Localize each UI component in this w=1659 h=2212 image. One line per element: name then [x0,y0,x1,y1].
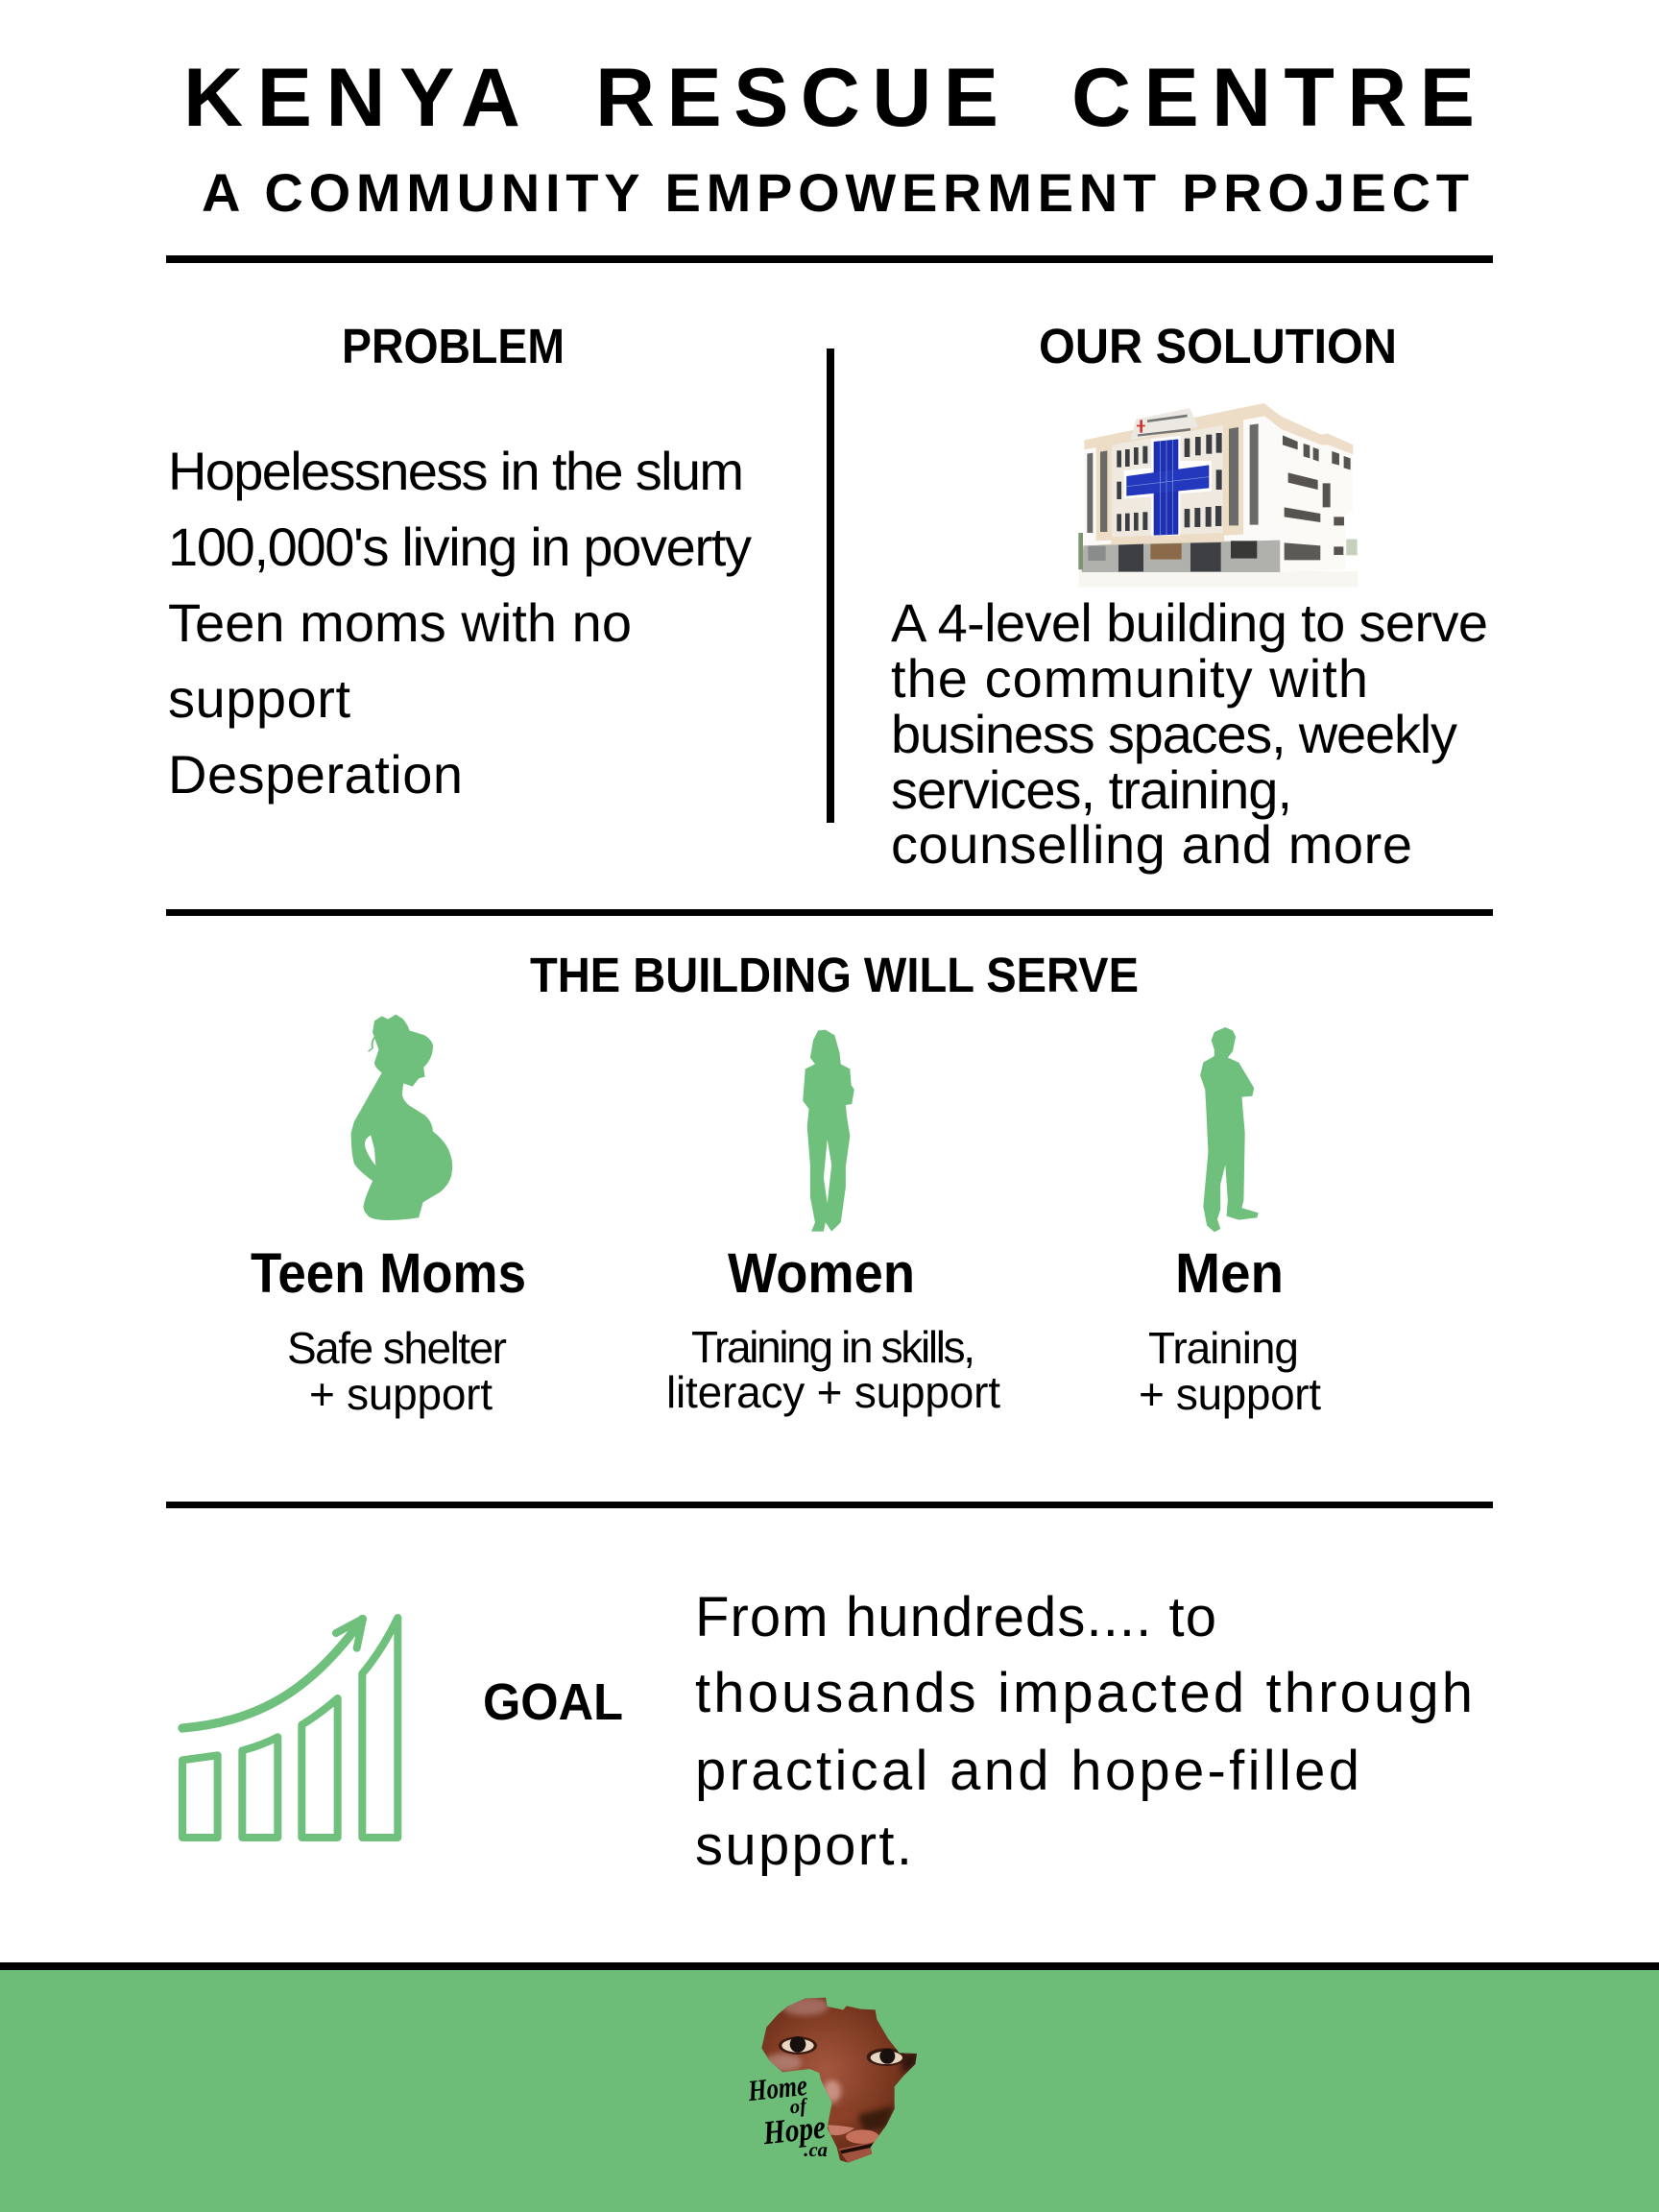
group: women: Women [728,1242,915,1305]
title: RESCUE [595,52,998,144]
heading: our solution: OUR SOLUTION [1039,319,1397,373]
group: men: + support [1139,1369,1321,1419]
goal text block [695,1586,1473,1877]
footer band [0,1962,1659,2212]
problem text block: Hopelessness in the slum [168,441,744,501]
subtitle: A COMMUNITY EMPOWERMENT PROJECT [202,162,1469,223]
title: CENTRE [1071,52,1475,144]
goal text block: From hundreds.... to [695,1586,1216,1648]
goal text block: thousands impacted through [695,1662,1473,1724]
problem text block: Teen moms with no [168,592,632,653]
heading: problem: PROBLEM [342,319,565,373]
group: teen moms: Teen Moms [251,1242,526,1305]
icon: man silhouette [1200,1027,1259,1232]
label: goal: GOAL [483,1673,623,1731]
logo: Home of Hope: Home [746,2069,808,2107]
title: KENYA [183,52,520,144]
problem text block [168,441,752,805]
group: women: Training in skills, [691,1322,975,1372]
group: men [1139,1242,1321,1419]
goal text block: support. [695,1815,912,1877]
solution text block: counselling and more [891,814,1412,875]
logo: Home of Hope [746,1994,922,2167]
group: teen moms: Safe shelter [287,1323,507,1373]
logo: Home of Hope: Hope [760,2109,828,2152]
logo: Home of Hope: .ca [804,2140,828,2161]
solution text block: services, training, [891,759,1292,820]
icon: building photo [1078,403,1358,588]
problem text block: Desperation [168,744,463,805]
solution text block [891,592,1488,875]
title [183,52,1475,144]
group: men: Training [1148,1323,1299,1373]
icon: pregnant teen mom silhouette [351,1015,452,1220]
logo: Home of Hope: of [789,2095,809,2118]
group: teen moms: + support [309,1369,493,1419]
icon: growth chart with arrow [182,1618,397,1838]
group: women: literacy + support [666,1367,1000,1417]
solution text block: A 4-level building to serve [891,592,1488,653]
heading: the building will serve: THE BUILDING WILL SERVE [530,948,1139,1002]
solution text block: business spaces, weekly [891,704,1457,764]
problem text block: support [168,668,350,729]
solution text block: the community with [891,648,1368,709]
icon: woman silhouette [803,1030,854,1232]
problem text block: 100,000's living in poverty [168,517,752,577]
group: women [666,1242,1000,1417]
goal text block: practical and hope-filled [695,1740,1359,1802]
group: teen moms [251,1242,526,1419]
group: men: Men [1175,1242,1284,1305]
